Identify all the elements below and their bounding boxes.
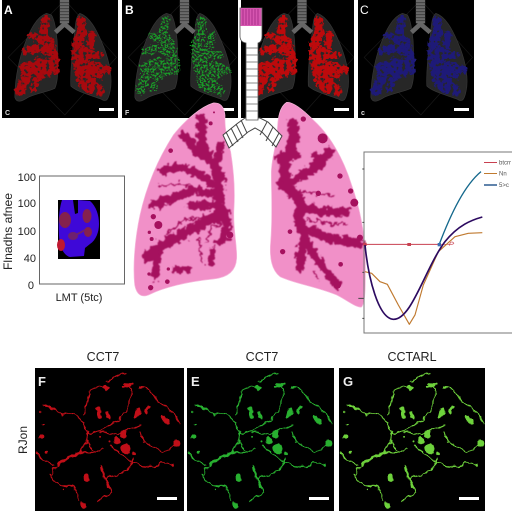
orange series: [365, 233, 482, 324]
illustration: bronchi: [223, 118, 282, 148]
illustration: central lungs with branching airways: [134, 102, 365, 307]
heading: CCT7 second: CCT7: [246, 350, 278, 364]
legend: 5>c: [499, 183, 509, 189]
red series: [363, 242, 454, 246]
panel: F red micrograph: [35, 368, 184, 511]
y axis ticks: 100: [18, 172, 36, 184]
illustration: trachea with pink cap: [240, 8, 262, 120]
chart: line chart on right: [358, 152, 512, 333]
chart: left heat-map plot: [1, 172, 124, 304]
panel: lung scan B (green): F: [125, 110, 130, 117]
right lung: [270, 102, 365, 307]
label: G: G: [343, 374, 353, 389]
heading: CCTARL: CCTARL: [387, 350, 437, 364]
legend: Nn: [499, 172, 507, 178]
panel: lung scan A (red): [2, 0, 118, 118]
label: C: C: [360, 3, 369, 17]
y axis ticks: 0: [28, 280, 34, 292]
legend: btcrr: [499, 160, 511, 166]
row label: RJon: [16, 426, 30, 454]
panel: lung scan (bright red): [241, 0, 354, 118]
y axis ticks: 40: [24, 253, 36, 265]
label: A: A: [4, 3, 13, 17]
panel: lung scan C (blue): c: [361, 110, 365, 117]
x axis label: LMT (5tc): [56, 292, 102, 304]
heat map image: [57, 200, 100, 259]
left lung: [134, 103, 237, 296]
label: B: B: [125, 3, 134, 17]
heading: CCT7: CCT7: [87, 350, 119, 364]
y axis label: Flnadhs afnee: [1, 193, 15, 270]
panel: E green micrograph: [187, 368, 334, 511]
teal series: [438, 172, 481, 246]
panel: lung scan C (blue): [358, 0, 474, 118]
panel: lung scan A (red): C: [5, 110, 10, 117]
label: E: E: [191, 374, 200, 389]
y axis ticks: 100: [18, 198, 36, 210]
legend: [484, 160, 511, 189]
y axis ticks: 100: [18, 226, 36, 238]
purple series: [365, 217, 482, 319]
label: F: F: [38, 374, 46, 389]
panel: lung scan B (green): [122, 0, 238, 118]
y axis ticks: [18, 172, 36, 292]
panel: G yellow-green micrograph: [339, 368, 485, 511]
